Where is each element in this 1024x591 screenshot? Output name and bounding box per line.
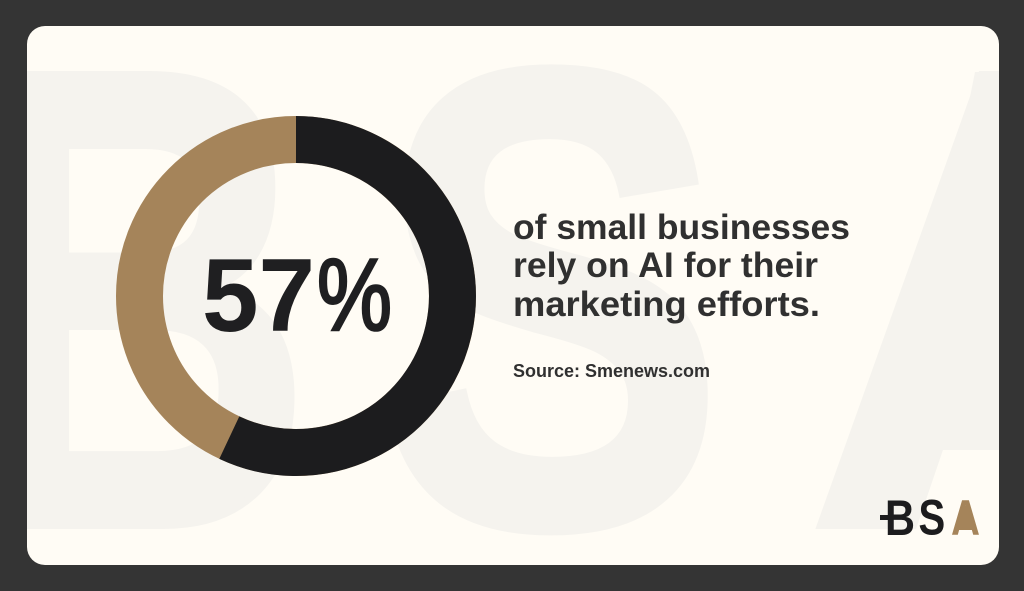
statistic description: marketing efforts. [513,285,820,324]
big number [202,238,392,354]
big number: % [317,238,392,352]
logo: BSA [880,490,980,546]
logo: BSA: A [951,490,980,546]
donut track: remaining 43 percent [140,140,452,452]
statistic description [513,208,850,324]
logo: BSA: B [885,490,915,546]
statistic description: rely on AI for their [513,246,818,285]
logo: BSA: S [918,490,945,546]
source: Source: Smenews.com [513,361,710,381]
statistic description: of small businesses [513,208,850,247]
donut arc: 57 percent [229,140,452,452]
big number: 57 [202,238,315,354]
donut chart: 57 percent [140,140,452,452]
